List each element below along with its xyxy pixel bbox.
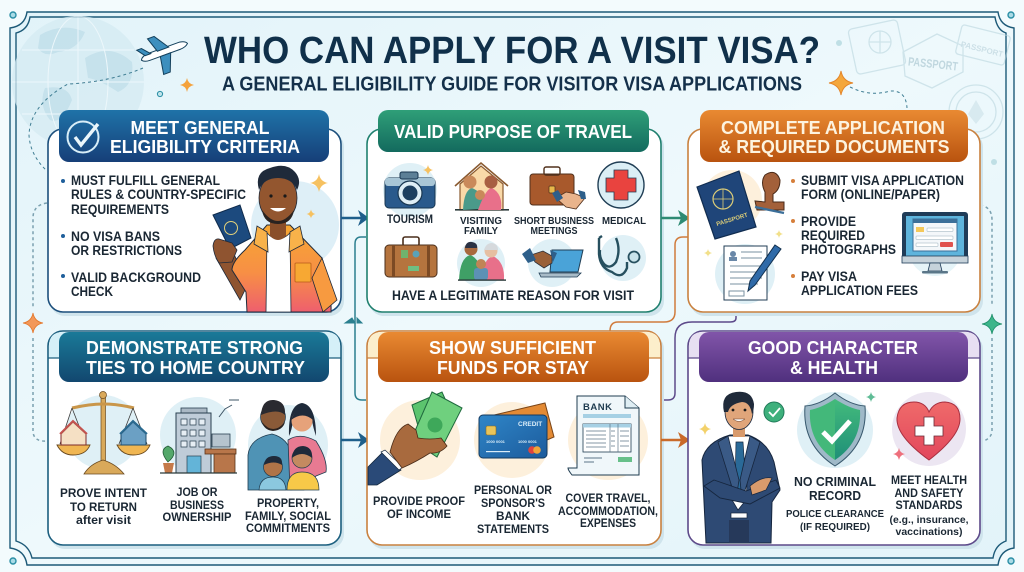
label: short business meetings: SHORT BUSINESS: [514, 215, 594, 227]
arrow: purpose to application: [661, 210, 690, 226]
bullet list: REQUIREMENTS: [71, 202, 169, 217]
bullet list: application: REQUIRED: [801, 228, 865, 243]
header: character: GOOD CHARACTER: [748, 338, 918, 358]
bullet list: application: APPLICATION FEES: [801, 283, 918, 298]
label: cover travel: ACCOMMODATION,: [558, 506, 658, 518]
icon: bank statement: [568, 396, 648, 480]
label: job or business ownership: OWNERSHIP: [162, 512, 232, 524]
label: tourism: TOURISM: [387, 214, 433, 226]
label: short business meetings: MEETINGS: [530, 225, 578, 237]
icon: family at home: [455, 163, 509, 211]
panel: valid purpose of travel: [367, 110, 664, 316]
header: funds: [378, 332, 649, 382]
header: general eligibility: MEET GENERAL: [130, 118, 270, 138]
label: visiting family: VISITING: [460, 215, 502, 227]
passport stamps: [848, 19, 1011, 139]
icon: bank statement: BANK: [583, 402, 612, 413]
title: WHO CAN APPLY FOR A VISIT VISA?: [204, 30, 820, 72]
connectors: [33, 203, 992, 442]
left star: [23, 313, 43, 333]
bullet list: NO VISA BANS: [71, 229, 160, 244]
label: cover travel: [558, 493, 658, 530]
icon: form and pen: [704, 230, 783, 304]
panel: complete application and documents: [688, 110, 983, 316]
label: cover travel: EXPENSES: [580, 518, 636, 530]
label: job or business ownership: [162, 487, 232, 524]
label: job or business ownership: BUSINESS: [170, 500, 224, 512]
label: visiting family: [460, 215, 502, 237]
label: proof of income: OF INCOME: [387, 509, 451, 521]
header: application: COMPLETE APPLICATION: [721, 118, 945, 138]
icon: credit cards: 1000 0001: [518, 439, 538, 444]
arrow: ties to funds: [341, 432, 369, 448]
icon: suitcase: [385, 237, 437, 277]
bullet list: CHECK: [71, 284, 113, 299]
illustration: businessman: [699, 392, 784, 543]
caption: legitimate reason: HAVE A LEGITIMATE REASON FOR VISIT: [392, 288, 635, 303]
bullet list: application: PHOTOGRAPHS: [801, 242, 896, 257]
label: bank statements: SPONSOR'S: [481, 498, 545, 510]
label: health and safety: MEET HEALTH: [891, 475, 967, 487]
header: character: & HEALTH: [790, 358, 878, 378]
passport stamps: PASSPORT: [960, 40, 1004, 59]
header: funds: SHOW SUFFICIENT: [429, 338, 596, 358]
label: bank statements: BANK: [496, 511, 531, 523]
icon: heart with cross: [892, 392, 966, 466]
sparkle and dot: [157, 40, 997, 165]
label: health and safety: (e.g., insurance,: [890, 514, 969, 526]
icon: computer monitor: [902, 212, 968, 276]
header: application: [700, 110, 968, 162]
globe illustration: [12, 16, 144, 148]
bullet list: application: FORM (ONLINE/PAPER): [801, 187, 940, 202]
illustration: family: [248, 400, 328, 490]
header: application: & REQUIRED DOCUMENTS: [718, 137, 950, 157]
icon: credit cards: CREDIT: [518, 421, 542, 428]
icon: green shield: [797, 392, 876, 468]
header: ties: [59, 332, 329, 382]
label: no criminal record: POLICE CLEARANCE: [786, 508, 884, 520]
bullet list: OR RESTRICTIONS: [71, 243, 182, 258]
arrow: funds to character: [661, 432, 690, 448]
dashed flight path: [29, 68, 143, 171]
bullet list: MUST FULFILL GENERAL: [71, 173, 220, 188]
header: funds: FUNDS FOR STAY: [437, 358, 589, 378]
label: property family social: PROPERTY,: [257, 498, 319, 510]
passport stamps: PASSPORT: [907, 54, 959, 74]
panel: strong ties to home country: [48, 331, 344, 549]
label: property family social: FAMILY, SOCIAL: [245, 511, 331, 523]
illustration: man holding passport: [213, 166, 339, 312]
label: short business meetings: [514, 215, 594, 237]
bullet list: application: PAY VISA: [801, 269, 857, 284]
icon: handshake and laptop: [522, 239, 583, 287]
bullet list: application: SUBMIT VISA APPLICATION: [801, 173, 964, 188]
label: prove intent: PROVE INTENT: [60, 486, 148, 500]
icon: passport and stamp: [697, 170, 784, 239]
subtitle: A GENERAL ELIGIBILITY GUIDE FOR VISITOR VISA APPLICATIONS: [222, 74, 802, 96]
bullet list: RULES & COUNTRY-SPECIFIC: [71, 187, 246, 202]
label: prove intent: after visit: [76, 513, 131, 527]
label: health and safety: vaccinations): [896, 526, 962, 538]
icon: medical cross: [598, 162, 644, 208]
top right star with dashed line: [829, 71, 907, 108]
label: visiting family: FAMILY: [464, 225, 498, 237]
header: ties: TIES TO HOME COUNTRY: [86, 358, 305, 378]
header: ties: DEMONSTRATE STRONG: [86, 338, 303, 358]
header: purpose of travel: [378, 110, 649, 152]
header: character: [699, 332, 968, 382]
label: health and safety: STANDARDS: [896, 500, 963, 512]
label: bank statements: [474, 485, 553, 536]
label: prove intent: TO RETURN: [70, 500, 137, 514]
icon: office building and desk: [160, 397, 239, 473]
label: property family social: COMMITMENTS: [246, 523, 330, 535]
panel: meet general eligibility criteria: [48, 110, 344, 316]
icon: balance scale with houses: [57, 392, 150, 474]
label: bank statements: PERSONAL OR: [474, 485, 553, 497]
arrow: general to purpose: [341, 210, 369, 226]
icon: family hug: [457, 239, 506, 287]
icon: passport and stamp: PASSPORT: [716, 213, 749, 228]
right star: [982, 314, 1002, 334]
label: proof of income: PROVIDE PROOF: [373, 496, 465, 508]
bullet list: application: PROVIDE: [801, 214, 856, 229]
icon: stethoscope: [599, 235, 646, 281]
label: no criminal record: NO CRIMINAL: [794, 475, 876, 489]
panel: good character and health: [688, 331, 983, 549]
panel: show sufficient funds: [367, 331, 664, 549]
label: health and safety: [890, 475, 969, 538]
label: no criminal record: (IF REQUIRED): [800, 521, 870, 533]
label: prove intent: [60, 486, 148, 527]
label: no criminal record: RECORD: [809, 489, 861, 503]
icon: camera: [383, 163, 437, 217]
label: no criminal record: [786, 475, 884, 533]
bullet list: application: [791, 173, 964, 298]
icon: hand holding cash: [368, 392, 462, 485]
airplane icon: [134, 27, 195, 80]
label: proof of income: [373, 496, 465, 521]
icon: credit cards: 1000 0001: [486, 439, 506, 444]
header: general eligibility: ELIGIBILITY CRITERIA: [110, 137, 300, 157]
header: general eligibility: [59, 110, 329, 162]
label: property family social: [245, 498, 331, 535]
header: purpose of travel: VALID PURPOSE OF TRAVEL: [394, 122, 632, 142]
label: bank statements: STATEMENTS: [477, 524, 549, 536]
icon: briefcase and handshake: [530, 167, 586, 209]
bullet list: [61, 173, 246, 299]
icon: credit cards: [474, 402, 554, 478]
label: job or business ownership: JOB OR: [176, 487, 218, 499]
label: health and safety: AND SAFETY: [894, 488, 964, 500]
label: cover travel: COVER TRAVEL,: [566, 493, 650, 505]
bullet list: VALID BACKGROUND: [71, 270, 201, 285]
label: medical: MEDICAL: [602, 215, 647, 227]
